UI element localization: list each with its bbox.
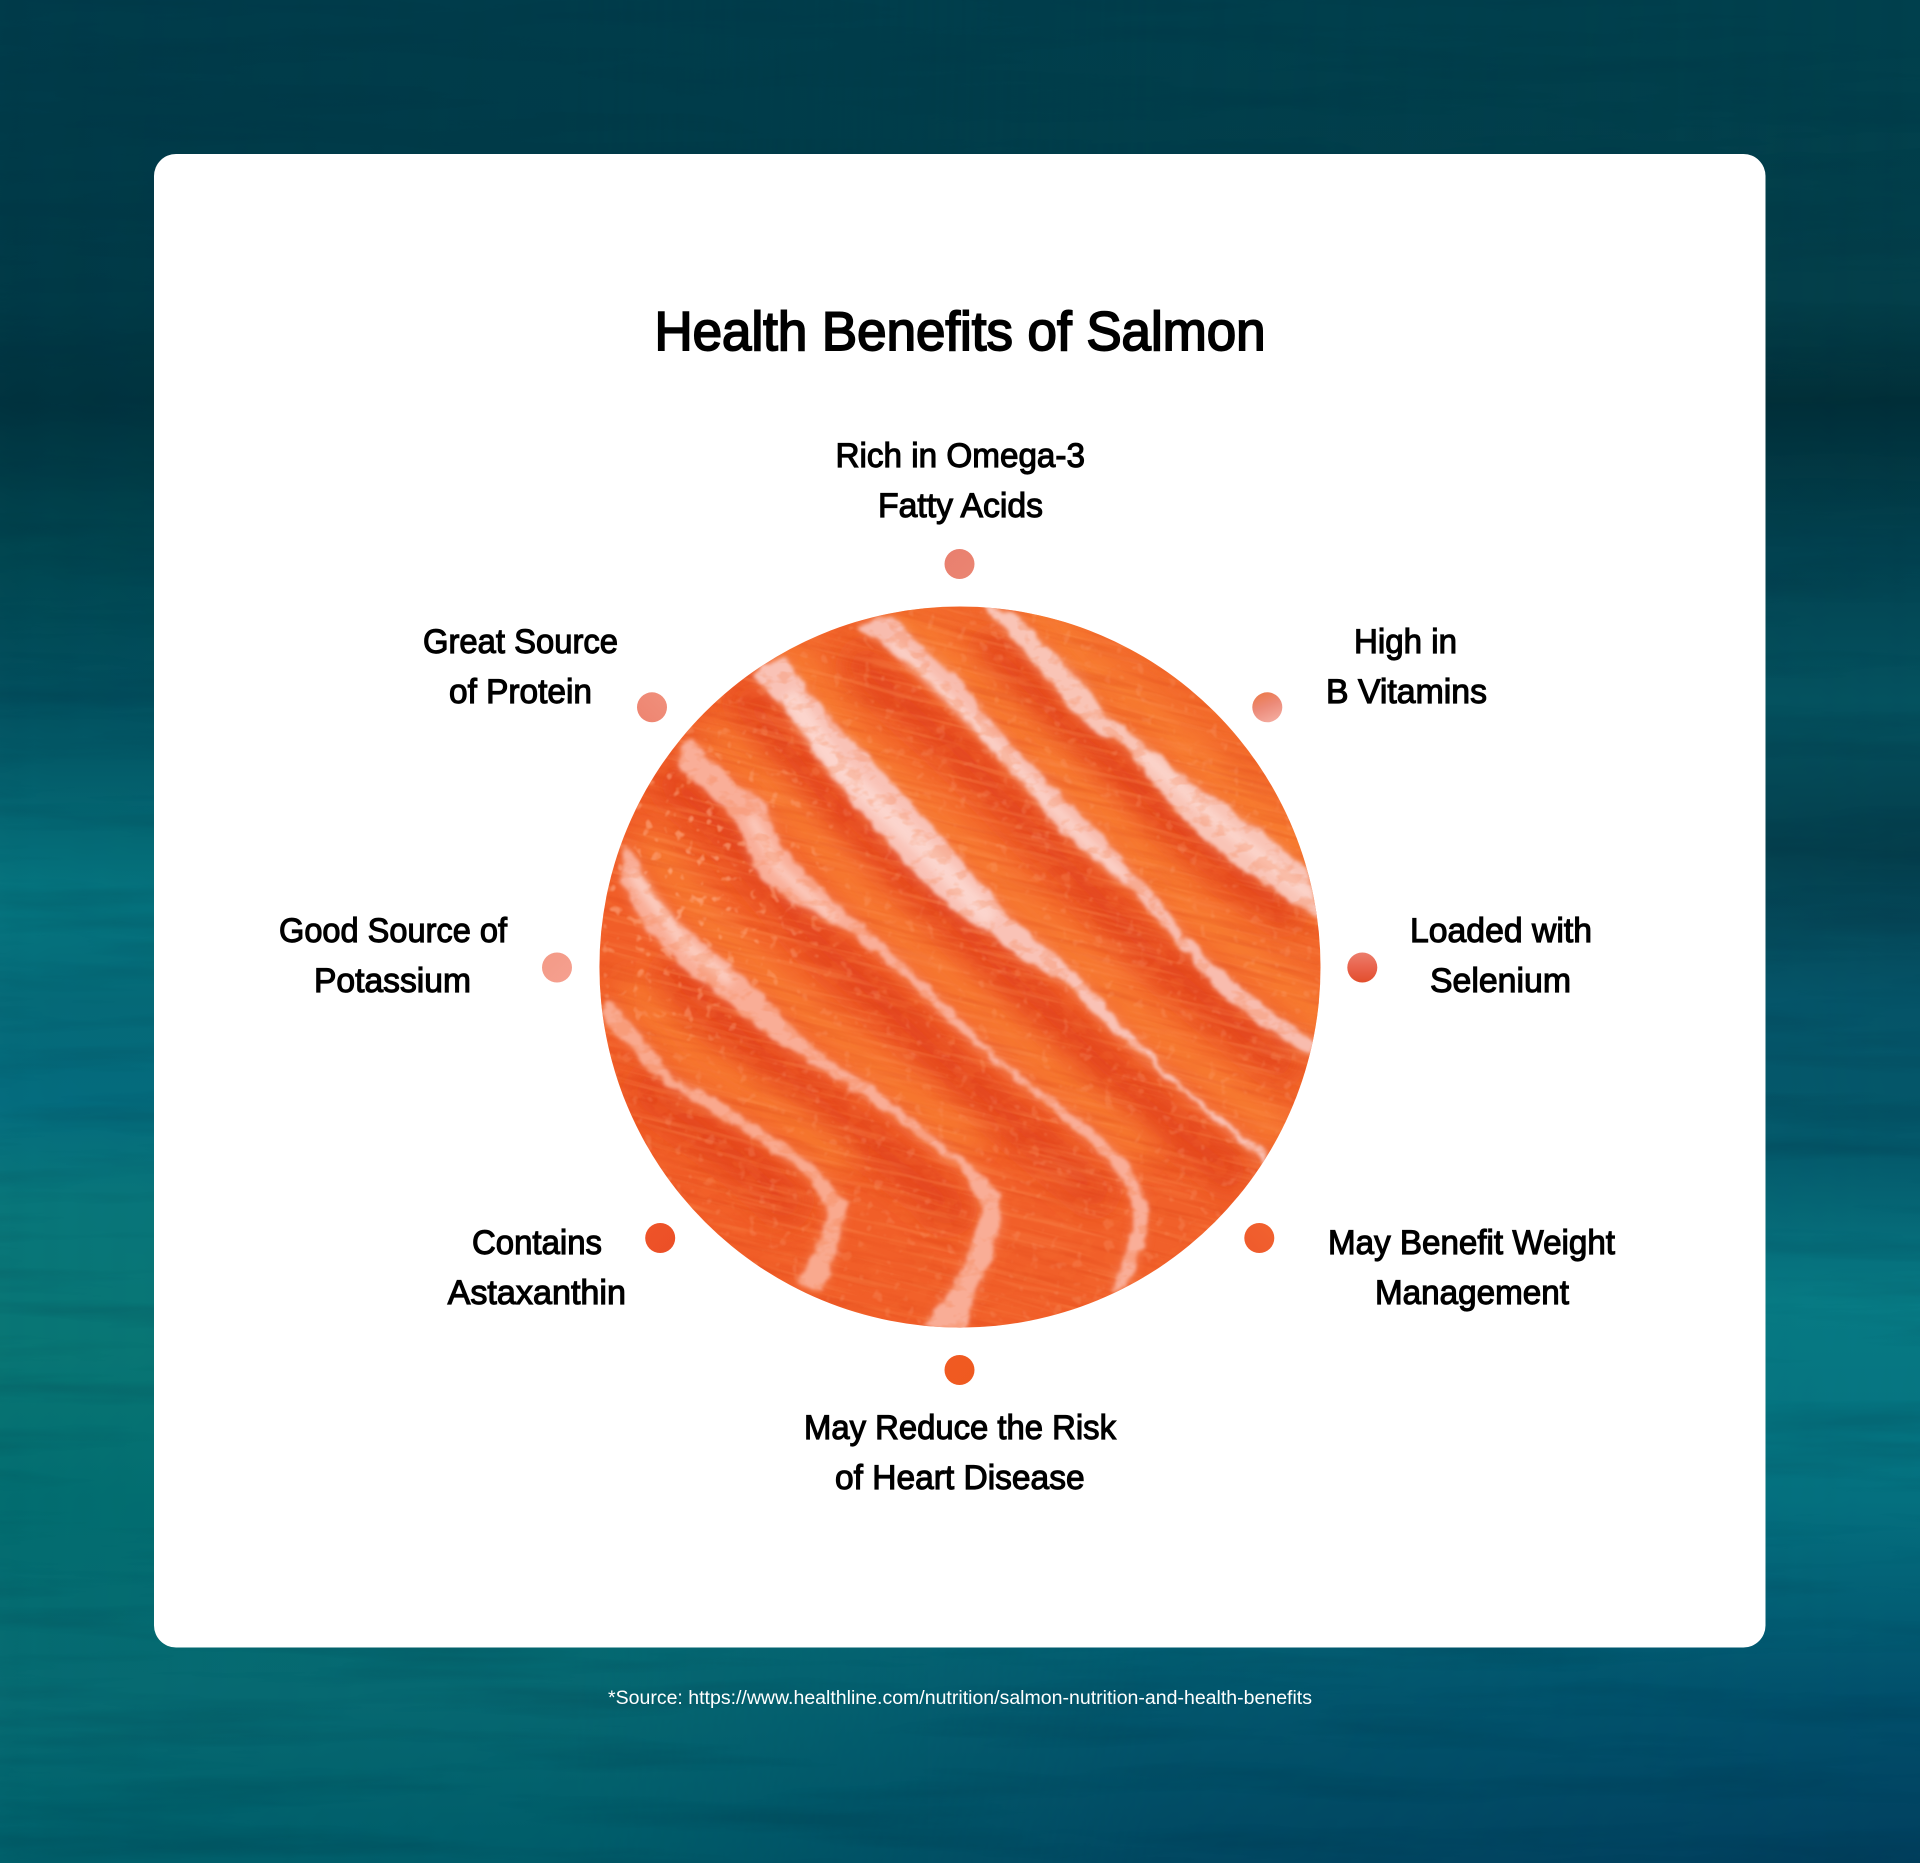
marker dot: top [944,549,974,579]
label: Good Source of Potassium [279,912,507,1000]
white fat stripes [604,609,1317,1329]
label: Rich in Omega-3 Fatty Acids [836,437,1085,525]
label: Good Source of Potassium: Potassium [314,962,471,1000]
label: High in B Vitamins: High in [1354,623,1457,661]
panel: white card [154,154,1766,1648]
label: May Benefit Weight Management: May Benefit Weight [1328,1224,1615,1262]
label: Loaded with Selenium: Selenium [1430,962,1571,1000]
source note: *Source: https://www.healthline.com/nutrition/salmon-nutrition-and-health-benefits [608,1688,1312,1709]
fat stripe highlights [632,642,1312,982]
central salmon fillet circle [599,606,1320,1328]
label: Contains Astaxanthin [448,1224,626,1312]
label: May Benefit Weight Management: Management [1375,1274,1569,1312]
marker dot: lower left [645,1223,675,1253]
label: Great Source of Protein: Great Source [423,623,618,661]
label: High in B Vitamins: B Vitamins [1326,673,1487,711]
marker dot: bottom [944,1355,974,1385]
brighter orange muscle bands [625,597,1338,1166]
soft fat halo [604,609,1317,1329]
label: Rich in Omega-3 Fatty Acids: Fatty Acids [878,487,1043,525]
orange mottling over fat and flesh [590,590,1330,1330]
label: Great Source of Protein [423,623,618,711]
label: May Benefit Weight Management [1328,1224,1615,1312]
marker dot: lower right [1244,1223,1274,1253]
title: Health Benefits of Salmon [654,300,1266,362]
label: May Reduce the Risk of Heart Disease: May Reduce the Risk [804,1409,1117,1447]
label: Rich in Omega-3 Fatty Acids: Rich in Omega-3 [836,437,1085,475]
muscle fibre lines [600,609,1320,1326]
label: Good Source of Potassium: Good Source of [279,912,507,950]
label: Great Source of Protein: of Protein [449,673,592,711]
label: May Reduce the Risk of Heart Disease [804,1409,1117,1497]
darker red muscle bands [637,640,1295,1222]
label: High in B Vitamins [1326,623,1487,711]
marker dot: upper right [1252,692,1282,722]
fat speckle texture [590,590,1330,1330]
marker dot: upper left [637,692,667,722]
label: Contains Astaxanthin: Astaxanthin [448,1274,626,1312]
label: Loaded with Selenium: Loaded with [1410,912,1592,950]
label: Contains Astaxanthin: Contains [472,1224,602,1262]
label: May Reduce the Risk of Heart Disease: of Heart Disease [835,1459,1085,1497]
marker dot: left [542,952,572,982]
label: Loaded with Selenium [1410,912,1592,1000]
marker dot: right [1347,952,1377,982]
